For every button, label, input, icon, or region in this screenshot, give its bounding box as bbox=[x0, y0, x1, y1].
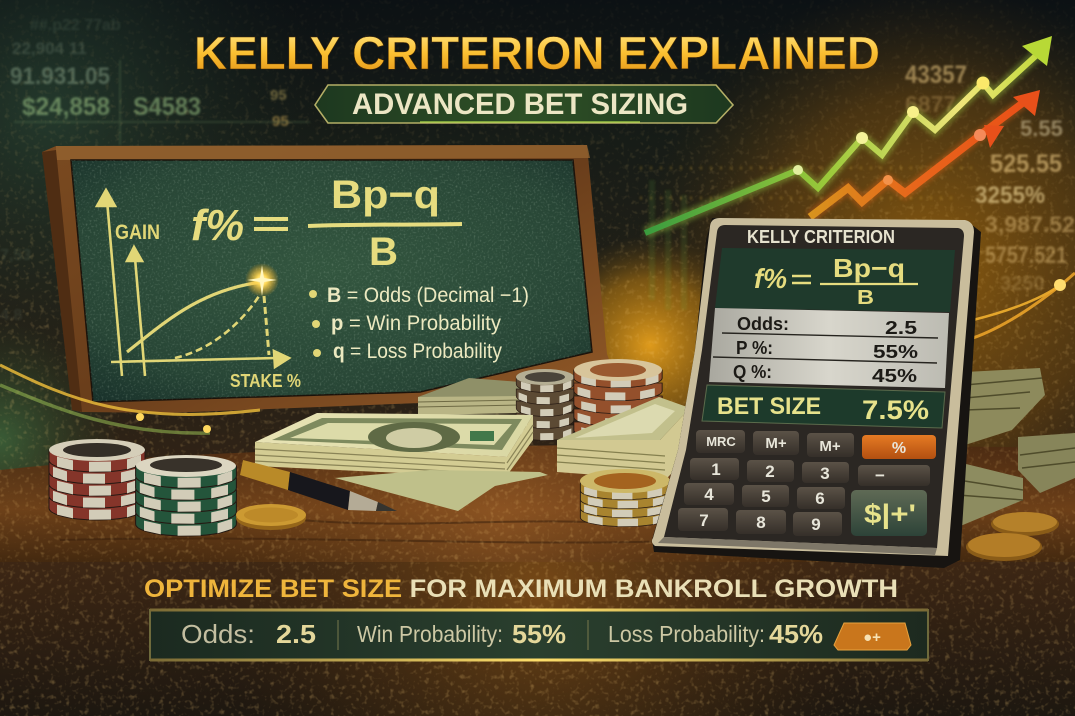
background ticker numbers: $24,858 bbox=[22, 93, 110, 121]
table surface bbox=[0, 445, 1075, 563]
background ticker numbers: 22,904 11 bbox=[12, 39, 87, 58]
keypad bbox=[678, 430, 936, 536]
gold coin bbox=[236, 504, 306, 530]
chip stack: red bbox=[49, 439, 145, 520]
formula: Bp−q bbox=[331, 173, 440, 217]
panel: calculator bbox=[652, 218, 981, 568]
bet size result: BET SIZE bbox=[717, 393, 821, 420]
gold button bbox=[834, 623, 911, 650]
background ticker numbers: 7,53 bbox=[0, 247, 31, 264]
keypad: 6 bbox=[815, 489, 825, 508]
keypad: M+ bbox=[765, 435, 787, 452]
keypad: 3 bbox=[820, 464, 830, 483]
calculator body bbox=[652, 218, 981, 568]
background ticker numbers: 3255% bbox=[975, 182, 1045, 209]
chalk surface bbox=[71, 160, 592, 402]
background ticker numbers: S4583 bbox=[133, 93, 201, 121]
keypad: 4 bbox=[704, 485, 714, 504]
keypad: 2 bbox=[765, 462, 775, 481]
loss probability stat: Loss Probability: bbox=[608, 621, 765, 647]
chart arrow: orange rising line bbox=[810, 90, 1040, 217]
keypad: MRC bbox=[706, 434, 736, 449]
gain stake chart: GAIN bbox=[115, 221, 160, 244]
background ticker numbers: 3250 bbox=[1000, 273, 1044, 295]
keypad: 7 bbox=[699, 511, 709, 530]
money stacks right bbox=[958, 368, 1075, 527]
calculator formula screen: Bp−q bbox=[833, 253, 905, 283]
input readouts: P %: bbox=[736, 338, 773, 358]
money stack back bbox=[418, 378, 520, 415]
money stack centre bbox=[255, 413, 533, 478]
calculator heading: KELLY CRITERION bbox=[747, 227, 895, 247]
keypad: 8 bbox=[756, 513, 766, 532]
calculator formula screen: B bbox=[857, 287, 874, 309]
bet size result bbox=[702, 385, 945, 428]
bottom tagline: OPTIMIZE BET SIZE FOR MAXIMUM BANKROLL GROWTH bbox=[144, 575, 898, 603]
background ticker numbers: 95 bbox=[270, 87, 287, 104]
formula: f% bbox=[191, 201, 244, 250]
odds stat: Odds: bbox=[181, 619, 255, 649]
input readouts: Q %: bbox=[733, 362, 772, 382]
gold button: ●+ bbox=[863, 629, 881, 646]
subtitle text: ADVANCED BET SIZING bbox=[352, 88, 688, 121]
title: KELLY CRITERION EXPLAINED bbox=[194, 27, 880, 79]
panel: chalkboard bbox=[42, 145, 620, 413]
background ticker numbers: 43357 bbox=[905, 61, 967, 89]
formula bbox=[191, 173, 462, 274]
input readouts: 55% bbox=[873, 342, 918, 362]
swoosh right bbox=[973, 273, 1075, 338]
formula: B bbox=[369, 230, 398, 274]
variable legend bbox=[309, 284, 529, 363]
input readouts bbox=[709, 308, 949, 388]
variable legend: q = Loss Probability bbox=[333, 340, 502, 363]
calculator formula screen bbox=[715, 248, 955, 312]
input readouts: 2.5 bbox=[885, 318, 917, 338]
background ticker numbers: 6877 bbox=[905, 91, 956, 117]
keypad: 9 bbox=[811, 515, 821, 534]
odds stat bbox=[181, 619, 316, 649]
pen bbox=[240, 460, 397, 511]
variable legend: p = Win Probability bbox=[331, 312, 501, 335]
odds stat: 2.5 bbox=[276, 619, 316, 649]
gain stake chart: STAKE % bbox=[230, 371, 301, 391]
banknotes under pen bbox=[335, 470, 548, 511]
variable legend: B = Odds (Decimal −1) bbox=[327, 284, 529, 307]
keypad: M+ bbox=[819, 438, 841, 455]
background ticker numbers: 525.55 bbox=[990, 150, 1062, 178]
gold coins right bbox=[966, 512, 1059, 561]
background ticker numbers: 91.931.05 bbox=[10, 63, 110, 90]
calculator formula screen: f% bbox=[754, 263, 787, 294]
background ticker numbers: 3,987.52 bbox=[985, 212, 1075, 237]
bet size result: 7.5% bbox=[862, 395, 929, 425]
keypad: 5 bbox=[761, 487, 771, 506]
background ticker numbers bbox=[0, 17, 1075, 324]
keypad: − bbox=[875, 466, 885, 485]
keypad: $|+' bbox=[864, 499, 916, 529]
keypad: 1 bbox=[711, 460, 721, 479]
stats bar bbox=[150, 610, 928, 660]
gain stake chart bbox=[97, 190, 301, 391]
win probability stat bbox=[357, 619, 566, 649]
background ticker numbers: 4.8 bbox=[0, 307, 22, 324]
chip stack: green bbox=[136, 455, 236, 536]
loss probability stat: 45% bbox=[769, 619, 823, 649]
input readouts: 45% bbox=[872, 366, 917, 386]
chip stack: gold front bbox=[580, 469, 670, 526]
background ticker numbers: ##.p22 77ab bbox=[30, 17, 121, 34]
input readouts: Odds: bbox=[737, 314, 789, 334]
background ticker numbers: 95 bbox=[272, 113, 289, 130]
chart arrow: green rising line bbox=[645, 36, 1052, 233]
chip stacks back bbox=[516, 359, 662, 440]
win probability stat: 55% bbox=[512, 619, 566, 649]
glowing swoosh left bbox=[0, 365, 260, 433]
background ticker numbers: 5.55 bbox=[1020, 116, 1063, 141]
board wood frame bbox=[42, 145, 620, 413]
subtitle ribbon bbox=[315, 85, 733, 123]
keypad: % bbox=[892, 440, 906, 457]
money stack middle right bbox=[557, 397, 690, 480]
loss probability stat bbox=[608, 619, 823, 649]
win probability stat: Win Probability: bbox=[357, 621, 503, 647]
